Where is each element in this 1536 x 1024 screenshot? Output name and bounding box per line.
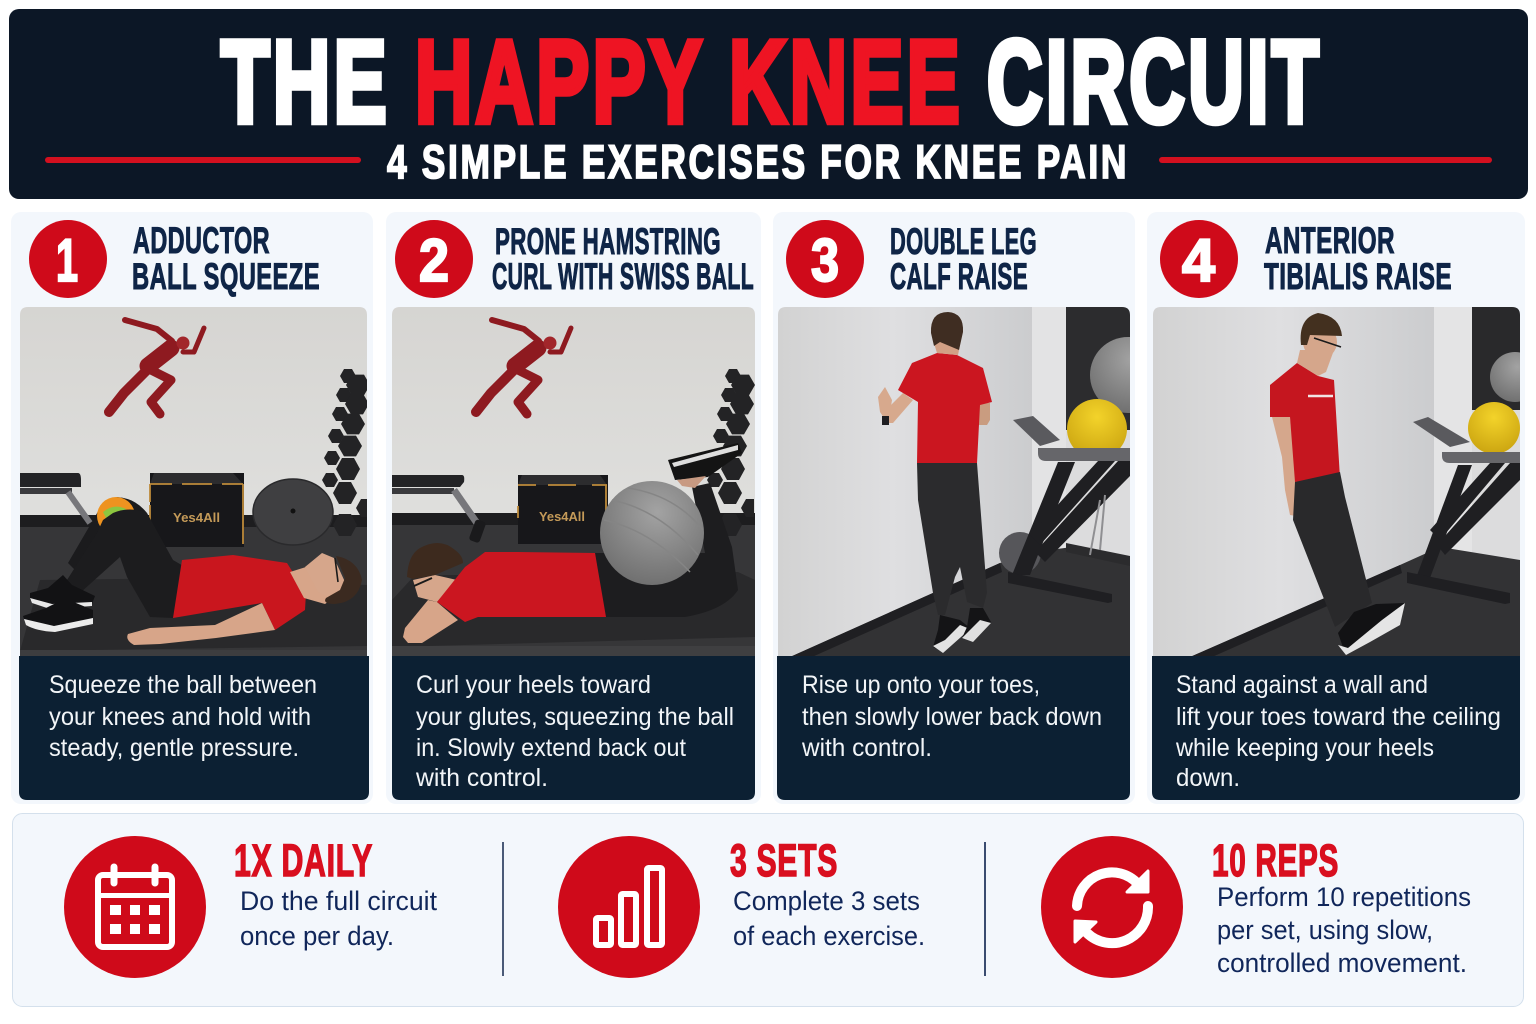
description panel 2: with control.: [415, 764, 548, 792]
number badge 2: [395, 220, 473, 298]
heading: prone hamstring curl: CURL WITH SWISS BALL: [492, 256, 754, 297]
shirt and arm: [173, 555, 306, 630]
stat: 3 sets: of each exercise.: [733, 921, 925, 951]
trousers: [917, 463, 986, 602]
number badge 2: 2: [419, 227, 449, 294]
description panel 3: with control.: [801, 734, 932, 762]
panel: exercise 1: [11, 212, 373, 804]
forearm: [403, 600, 458, 643]
shirt: [898, 353, 992, 463]
number badge 4: [1160, 220, 1238, 298]
photo: anterior tibialis raise: [1153, 307, 1536, 657]
stat: 3 sets: [730, 835, 925, 951]
number badge 1: [29, 220, 107, 298]
stat: 1x daily: 1X DAILY: [234, 835, 373, 886]
panel: exercise 2: [386, 212, 761, 804]
number badge 3: [786, 220, 864, 298]
shoes: [1338, 603, 1405, 653]
heading: double leg calf raise: [890, 221, 1037, 297]
panel: exercise 3: [773, 212, 1166, 804]
stat: 10 reps: 10 REPS: [1212, 835, 1339, 886]
description panel 2: [392, 656, 755, 800]
far leg: [68, 497, 150, 572]
head and neck: [1297, 350, 1334, 376]
subtitle: 4 SIMPLE EXERCISES FOR KNEE PAIN: [387, 135, 1129, 188]
title: HAPPY KNEE: [415, 16, 963, 147]
stat: 3 sets: 3 SETS: [730, 835, 838, 886]
heading: prone hamstring curl: PRONE HAMSTRING: [495, 221, 721, 262]
description panel 4: lift your toes toward the ceiling: [1176, 703, 1501, 731]
shirt: [1270, 363, 1340, 482]
number badge 1: 1: [56, 227, 78, 294]
photo: adductor ball squeeze: Yes4All: [173, 510, 220, 525]
number badge 3: 3: [811, 227, 839, 294]
shirt: [437, 552, 606, 622]
stat: 1x daily: once per day.: [240, 921, 394, 951]
icon: bar chart: [558, 836, 700, 978]
heading: adductor ball squeeze: [132, 220, 320, 297]
description panel 4: Stand against a wall and: [1176, 671, 1428, 699]
description panel 2: your glutes, squeezing the ball: [416, 703, 734, 731]
stat: 10 reps: [1212, 835, 1471, 978]
title: CIRCUIT: [987, 16, 1322, 147]
head: [934, 342, 960, 355]
description panel 2: Curl your heels toward: [416, 671, 651, 699]
header banner: [9, 9, 1528, 199]
heading: double leg calf raise: DOUBLE LEG: [890, 221, 1037, 262]
stat: 10 reps: controlled movement.: [1217, 948, 1467, 978]
heading: prone hamstring curl: [492, 221, 754, 297]
description panel 2: in. Slowly extend back out: [416, 734, 686, 762]
heading: anterior tibialis raise: ANTERIOR: [1265, 220, 1395, 261]
panel: exercise 4: [1147, 212, 1536, 804]
near leg: [67, 510, 185, 618]
left hand and arm: [878, 387, 892, 418]
stat: 10 reps: Perform 10 repetitions: [1217, 882, 1471, 912]
hair: [407, 543, 463, 579]
description panel 3: [777, 656, 1130, 800]
panel: dosage summary: [12, 814, 1524, 1006]
icon: calendar: [64, 836, 206, 978]
icon: repeat arrows: [1041, 836, 1183, 978]
description panel 1: your knees and hold with: [49, 703, 311, 731]
description panel 3: Rise up onto your toes,: [802, 671, 1040, 699]
title: THE: [221, 16, 390, 147]
number badge 4: 4: [1182, 227, 1216, 294]
photo: prone hamstring curl: [392, 307, 756, 657]
stat: 10 reps: per set, using slow,: [1217, 915, 1433, 945]
description panel 4: [1152, 656, 1520, 800]
heading: adductor ball squeeze: ADDUCTOR: [133, 220, 270, 261]
arm: [1272, 417, 1295, 516]
heading: anterior tibialis raise: [1264, 220, 1452, 297]
stat: 1x daily: [234, 835, 437, 951]
description panel 1: [19, 656, 369, 800]
heading: adductor ball squeeze: BALL SQUEEZE: [132, 256, 320, 297]
photo: double leg calf raise: [778, 307, 1166, 657]
description panel 4: while keeping your heels: [1175, 734, 1434, 762]
stat: 1x daily: Do the full circuit: [240, 886, 437, 916]
description panel 4: down.: [1176, 764, 1240, 792]
stat: 3 sets: Complete 3 sets: [733, 886, 920, 916]
trousers: [1293, 472, 1372, 627]
heading: double leg calf raise: CALF RAISE: [890, 256, 1028, 297]
description panel 1: steady, gentle pressure.: [49, 734, 299, 762]
photo: adductor ball squeeze: [20, 307, 370, 658]
description panel 1: Squeeze the ball between: [49, 671, 317, 699]
description panel 3: then slowly lower back down: [802, 703, 1102, 731]
shoes: [933, 615, 967, 649]
face: [413, 575, 457, 602]
photo: prone hamstring curl: Yes4All: [539, 509, 585, 524]
